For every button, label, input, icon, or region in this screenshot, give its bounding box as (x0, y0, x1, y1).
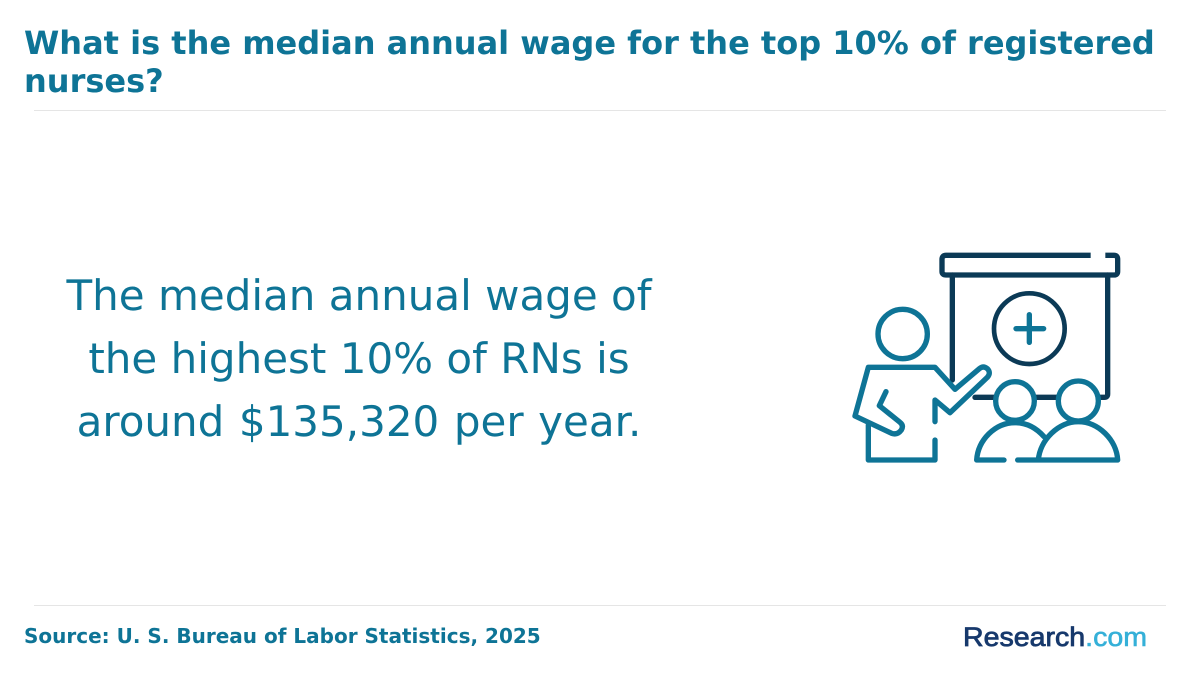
logo: Research.com (963, 622, 1147, 652)
main statement text: around $135,320 per year. (77, 397, 641, 446)
icon: plus sign (1016, 315, 1044, 342)
icon: presentation board (942, 255, 1118, 397)
main statement text (66, 271, 652, 446)
icon: audience (977, 381, 1118, 460)
source note: Source: U. S. Bureau of Labor Statistics, 2025 (24, 624, 541, 648)
icon: presenter (855, 309, 989, 460)
main statement text: the highest 10% of RNs is (88, 334, 630, 383)
title: nurses? (24, 62, 164, 100)
title (24, 24, 1155, 100)
main statement text: The median annual wage of (66, 271, 652, 320)
title: What is the median annual wage for the top 10% of registered (24, 24, 1155, 62)
icon: presenter with board and audience (852, 252, 1120, 463)
